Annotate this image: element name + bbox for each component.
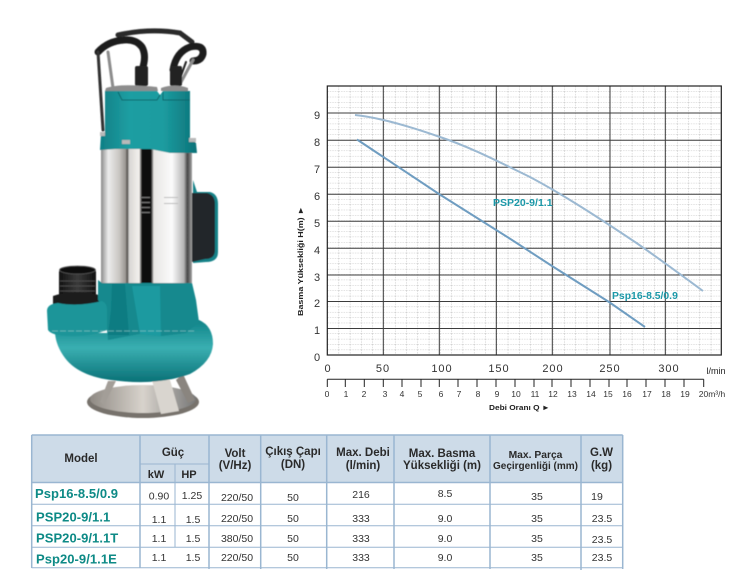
table row model names: Psp16-8.5/0.9 — [35, 486, 118, 501]
row Psp20-9/1.1E: 9.0 — [438, 552, 452, 564]
row Psp20-9/1.1E: 23.5 — [592, 552, 612, 564]
table headers: Max. Parça — [509, 450, 563, 461]
x axis m3/h numbers: 16 — [622, 389, 632, 399]
row Psp16-8.5/0.9: 50 — [287, 492, 299, 504]
x axis m3/h numbers: 2 — [362, 389, 367, 399]
table row model names — [35, 486, 118, 566]
y axis numbers: 1 — [314, 325, 320, 337]
x axis m3/h numbers — [325, 389, 725, 399]
x axis m3/h numbers: 7 — [457, 389, 462, 399]
row PSP20-9/1.1T — [152, 533, 612, 546]
x axis l/min numbers: 100 — [431, 363, 453, 375]
table headers: Model — [64, 453, 98, 465]
major grid — [327, 86, 721, 355]
row PSP20-9/1.1T: 333 — [352, 533, 370, 545]
table row model names: PSP20-9/1.1T — [36, 530, 118, 546]
x axis m3/h numbers: 17 — [642, 389, 652, 399]
chart: pump performance curves — [296, 86, 726, 412]
row Psp16-8.5/0.9: 8.5 — [438, 488, 452, 500]
x axis title: Debi Oranı Q ► — [489, 403, 550, 412]
row Psp16-8.5/0.9: 19 — [591, 491, 603, 503]
x axis l/min numbers: 300 — [658, 363, 680, 375]
table headers: (V/Hz) — [219, 460, 251, 472]
row Psp20-9/1.1E: 333 — [352, 552, 370, 564]
x axis m3/h numbers: 6 — [439, 389, 444, 399]
row PSP20-9/1.1: 1.1 — [152, 514, 166, 526]
table headers: (kg) — [591, 460, 612, 472]
row PSP20-9/1.1: 23.5 — [592, 513, 612, 525]
row Psp20-9/1.1E: 1.5 — [186, 552, 200, 564]
row Psp16-8.5/0.9: 1.25 — [182, 490, 202, 502]
row Psp16-8.5/0.9: 220/50 — [221, 492, 253, 504]
row Psp16-8.5/0.9: 0.90 — [149, 490, 169, 502]
row PSP20-9/1.1: 1.5 — [186, 514, 200, 526]
y axis numbers: 3 — [314, 272, 320, 284]
x axis m3/h numbers: 1 — [344, 389, 349, 399]
y axis numbers: 2 — [314, 298, 320, 310]
curve: Psp16-8.5/0.9 — [357, 140, 645, 327]
table: specifications — [32, 435, 623, 570]
y axis numbers: 5 — [314, 218, 320, 230]
curve label: PSP20-9/1.1: PSP20-9/1.1 — [493, 197, 553, 209]
y axis numbers: 4 — [314, 245, 320, 257]
x axis m3/h numbers: 9 — [495, 389, 500, 399]
pump photo illustration — [47, 31, 218, 418]
row PSP20-9/1.1T: 1.1 — [152, 533, 166, 545]
row Psp20-9/1.1E: 220/50 — [221, 552, 253, 564]
row PSP20-9/1.1T: 35 — [531, 533, 543, 545]
row PSP20-9/1.1: 220/50 — [221, 513, 253, 525]
row Psp20-9/1.1E: 50 — [287, 552, 299, 564]
table headers: (DN) — [281, 459, 305, 471]
x axis m3/h numbers: 3 — [383, 389, 388, 399]
table row model names: PSP20-9/1.1 — [36, 510, 110, 524]
y axis numbers: 6 — [314, 191, 320, 203]
curve label: Psp16-8.5/0.9: Psp16-8.5/0.9 — [612, 291, 678, 302]
table headers: HP — [181, 469, 197, 481]
row Psp16-8.5/0.9: 35 — [531, 491, 543, 503]
icon: teal motor head — [100, 85, 197, 153]
x axis m3/h scale — [327, 379, 704, 387]
table headers: Volt — [225, 448, 246, 460]
icon: float switch — [192, 180, 218, 263]
row Psp20-9/1.1E — [152, 552, 612, 564]
table headers — [64, 446, 613, 481]
row Psp16-8.5/0.9: 216 — [352, 489, 370, 501]
table headers: kW — [148, 469, 165, 481]
row Psp20-9/1.1E: 1.1 — [152, 552, 166, 564]
x axis m3/h numbers: 10 — [511, 389, 521, 399]
row PSP20-9/1.1T: 23.5 — [592, 534, 612, 546]
row PSP20-9/1.1T: 380/50 — [221, 533, 253, 545]
x axis m3/h numbers: 20m³/h — [699, 389, 725, 399]
table headers: Max. Basma — [409, 448, 476, 460]
x axis m3/h numbers: 11 — [531, 389, 540, 399]
row PSP20-9/1.1: 333 — [352, 513, 370, 525]
curve: PSP20-9/1.1 — [355, 115, 703, 291]
table headers: Geçirgenliği (mm) — [493, 461, 578, 472]
x axis m3/h numbers: 18 — [661, 389, 671, 399]
table grid lines — [32, 435, 623, 570]
x axis unit l/min: l/min — [706, 366, 726, 376]
row PSP20-9/1.1T: 50 — [287, 533, 299, 545]
row PSP20-9/1.1T: 1.5 — [186, 533, 200, 545]
x axis l/min numbers: 250 — [599, 363, 621, 375]
x axis m3/h numbers: 8 — [476, 389, 481, 399]
x axis m3/h numbers: 12 — [548, 389, 558, 399]
y axis numbers: 7 — [314, 164, 320, 176]
x axis l/min numbers — [324, 363, 680, 375]
icon: power cables and handle — [98, 31, 203, 130]
icon: teal pump volute — [47, 280, 213, 382]
table headers: (l/min) — [346, 460, 380, 472]
x axis l/min numbers: 0 — [324, 363, 332, 375]
x axis l/min numbers: 50 — [376, 363, 390, 375]
y axis numbers: 8 — [314, 137, 320, 149]
table row model names: Psp20-9/1.1E — [36, 552, 117, 566]
x axis l/min numbers: 150 — [488, 363, 510, 375]
x axis m3/h numbers: 19 — [680, 389, 690, 399]
icon: outlet hose connector — [53, 266, 102, 311]
x axis m3/h numbers: 13 — [567, 389, 577, 399]
table headers: Yüksekliği (m) — [403, 460, 481, 472]
x axis m3/h numbers: 5 — [418, 389, 423, 399]
table header background — [32, 435, 623, 482]
x axis l/min numbers: 200 — [542, 363, 564, 375]
minor grid — [327, 86, 721, 355]
x axis m3/h numbers: 0 — [325, 389, 330, 399]
y axis title: Basma Yüksekliği H(m) ► — [296, 206, 305, 316]
y axis numbers: 9 — [314, 110, 320, 122]
y axis numbers: 0 — [314, 352, 320, 364]
row PSP20-9/1.1: 9.0 — [438, 513, 452, 525]
table headers: Güç — [162, 447, 185, 459]
row Psp16-8.5/0.9 — [149, 488, 603, 504]
table headers: Max. Debi — [336, 447, 390, 459]
x axis m3/h numbers: 4 — [400, 389, 405, 399]
row PSP20-9/1.1T: 9.0 — [438, 533, 452, 545]
table headers: G.W — [590, 447, 613, 459]
y axis numbers — [314, 110, 320, 364]
icon: metal foot stand — [87, 374, 199, 418]
table row values — [149, 488, 612, 564]
row PSP20-9/1.1: 50 — [287, 513, 299, 525]
row PSP20-9/1.1: 35 — [531, 513, 543, 525]
icon: steel motor housing — [101, 148, 192, 284]
x axis m3/h numbers: 14 — [586, 389, 596, 399]
table headers: Çıkış Çapı — [265, 446, 321, 458]
icon: nameplate text area — [140, 197, 178, 213]
row PSP20-9/1.1 — [152, 513, 612, 526]
row Psp20-9/1.1E: 35 — [531, 552, 543, 564]
x axis m3/h numbers: 15 — [603, 389, 613, 399]
